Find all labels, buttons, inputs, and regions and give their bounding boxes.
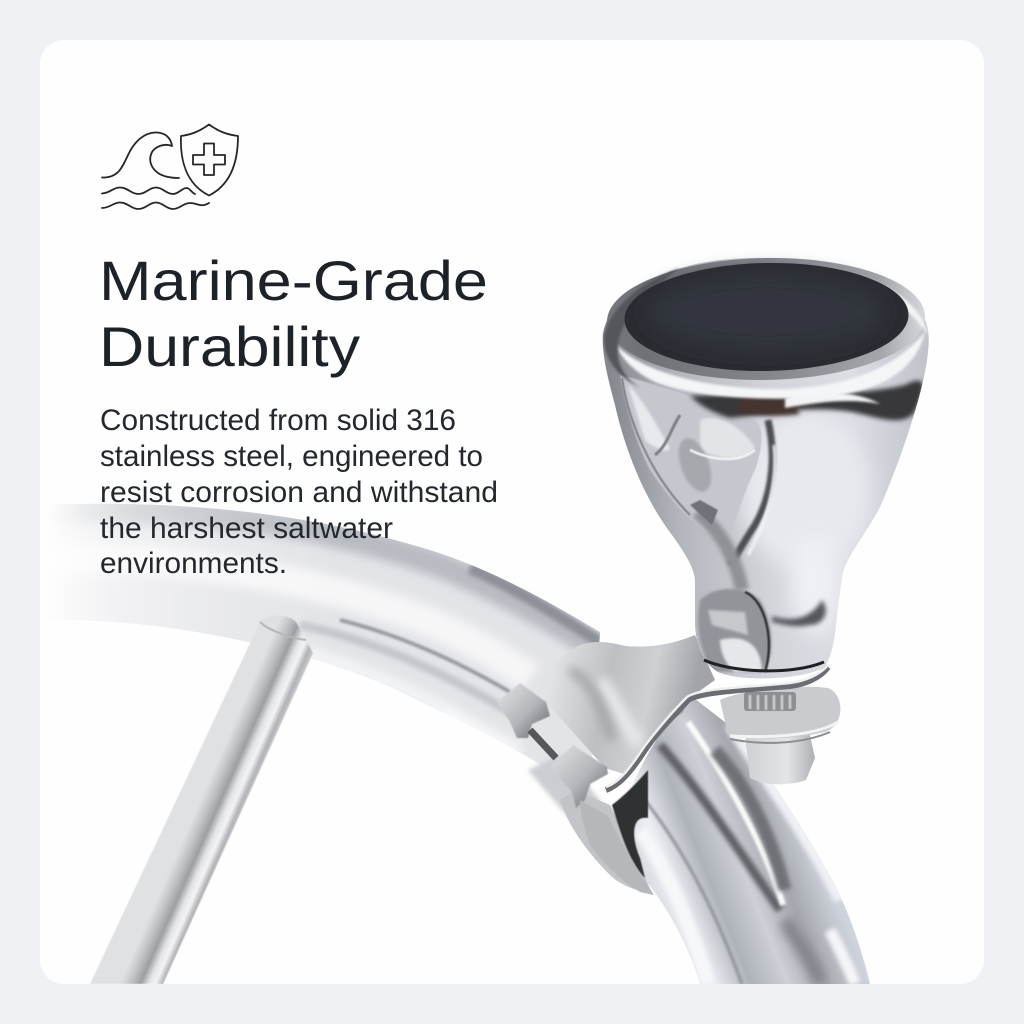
body text: the harshest saltwater <box>100 512 393 545</box>
body text: resist corrosion and withstand <box>100 476 498 509</box>
icon water ripples <box>102 188 209 209</box>
icon wave crest <box>102 132 179 178</box>
icon: wave and shield <box>102 124 238 209</box>
icon shield <box>181 124 238 196</box>
knob neck reflections <box>698 589 772 672</box>
clamp lug lower <box>561 746 608 808</box>
heading: Durability <box>99 315 360 378</box>
knob <box>603 255 929 678</box>
body text: stainless steel, engineered to <box>100 440 483 473</box>
knob dark under-rim reflection <box>690 381 923 420</box>
icon cross <box>193 144 225 175</box>
clamp pin <box>530 730 556 758</box>
knob rim highlight <box>616 332 925 399</box>
clamp bolt and nut <box>720 687 840 784</box>
clamp side band <box>580 800 654 895</box>
body text: environments. <box>100 547 287 580</box>
upper wheel tube <box>62 504 600 791</box>
product photo: steering knob on stainless wheel <box>30 255 929 990</box>
knob curved dark streak <box>730 420 772 565</box>
clamp band <box>537 635 828 790</box>
knob black grip pad <box>624 261 909 373</box>
knob rim <box>606 255 926 383</box>
knob rim left shadow <box>604 268 680 388</box>
heading: Marine-Grade <box>99 249 488 312</box>
heading <box>99 249 488 378</box>
tube underside below clamp <box>528 756 602 818</box>
body text <box>100 404 498 580</box>
lower wheel tube <box>631 700 870 984</box>
body text: Constructed from solid 316 <box>100 404 456 437</box>
knob reflection window <box>620 375 761 545</box>
knob neck base ring <box>704 660 824 671</box>
knob soft highlights <box>740 410 870 570</box>
clamp gap shadow <box>612 770 648 878</box>
clamp lower band <box>560 790 653 895</box>
knob rim right gleam <box>860 276 928 335</box>
spoke rod <box>90 615 313 984</box>
clamp lug upper <box>497 683 550 738</box>
